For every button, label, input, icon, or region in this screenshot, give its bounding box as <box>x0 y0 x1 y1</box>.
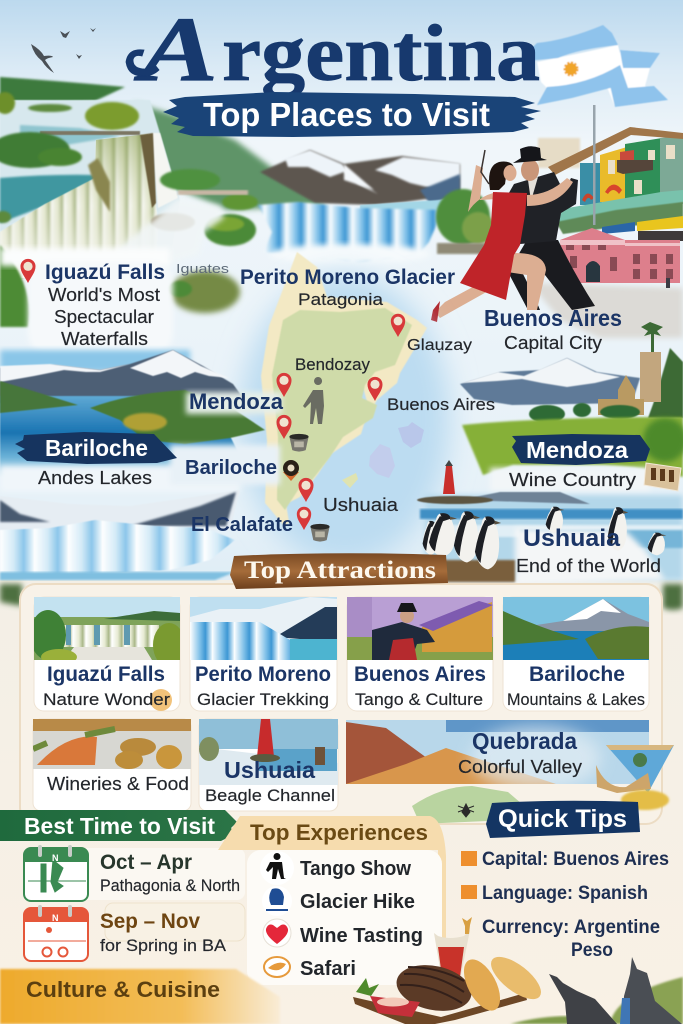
panel: quick tips: Currency: Argentine <box>482 917 660 938</box>
lighthouse <box>443 460 455 494</box>
illustration: tango dancers <box>431 146 595 322</box>
balcony <box>617 160 653 174</box>
bushes <box>0 92 258 327</box>
back fold <box>607 50 668 107</box>
subtitle banner <box>163 92 541 137</box>
map labels: Patagonia <box>298 290 384 309</box>
banner: Bariloche <box>15 432 177 464</box>
card: Iguazú Falls: Nature Wonder <box>43 690 170 709</box>
illustration: grass and bulls <box>510 957 683 1024</box>
map labels: Buenos Aires <box>484 305 622 331</box>
panel: quick tips: Language: Spanish <box>482 883 648 904</box>
forested shore <box>0 381 78 413</box>
teal wall <box>580 163 602 205</box>
icon: orange mail <box>461 885 477 899</box>
green heading <box>0 810 237 841</box>
panel: quick tips: Quick Tips <box>498 805 627 833</box>
text haze <box>515 528 665 586</box>
peninsula <box>90 390 265 444</box>
banner: Bariloche: Bariloche <box>45 435 148 461</box>
title: A <box>134 0 218 100</box>
card: Bariloche: Mountains & Lakes <box>507 690 645 709</box>
forest patches beside panel <box>0 584 683 610</box>
shore <box>425 560 515 582</box>
card: Bariloche <box>503 597 649 711</box>
card: Quebrada: Colorful Valley <box>458 757 582 777</box>
panel: best time to visit <box>0 810 245 961</box>
scene: Ushuaia coast <box>417 460 683 586</box>
card: Wineries & Food <box>33 719 191 811</box>
back leg <box>435 282 490 318</box>
panel: quick tips: Peso <box>571 940 613 961</box>
pink palace <box>560 228 680 283</box>
cream base <box>261 252 427 527</box>
church <box>598 375 644 415</box>
title: rgentina <box>222 10 540 98</box>
shop signs <box>637 216 683 231</box>
icon: heart <box>263 919 291 947</box>
card: Iguazú Falls: Iguazú Falls <box>47 663 165 686</box>
card: Ushuaia <box>199 719 338 811</box>
flowers <box>621 790 669 810</box>
scene: Bariloche lake <box>0 350 282 492</box>
rock strip <box>140 133 156 208</box>
back mountain slope <box>135 103 327 210</box>
label: Wine Country: Wine Country <box>509 470 636 490</box>
shoe <box>431 301 440 322</box>
upper river <box>0 100 180 260</box>
top band <box>517 25 618 62</box>
lake <box>360 199 455 217</box>
arches <box>605 184 622 194</box>
mountains <box>460 358 640 405</box>
green region <box>272 308 412 510</box>
scene: Buenos Aires buildings <box>530 105 683 338</box>
banner <box>486 801 640 838</box>
tree beside dancers <box>436 189 490 245</box>
label: Ushuaia: Ushuaia <box>523 525 621 552</box>
haze for text <box>28 262 173 354</box>
icon: red calendar: N <box>52 913 58 923</box>
icon: tango dancer <box>260 851 294 885</box>
front white <box>537 45 628 88</box>
panel: quick tips <box>461 801 669 961</box>
red dress <box>460 192 527 300</box>
card: Buenos Aires: Tango & Culture <box>355 690 483 709</box>
subtitle banner: Top Places to Visit <box>203 96 490 133</box>
teal pool <box>0 175 97 223</box>
card: Quebrada <box>346 720 649 790</box>
stick <box>481 150 489 184</box>
heading: Top Attractions: Top Attractions <box>244 557 436 584</box>
illustration: folded boat and sail <box>596 745 674 793</box>
birds <box>31 28 96 73</box>
hat <box>513 146 547 163</box>
lower bush <box>170 271 240 313</box>
woman second arm <box>527 178 573 206</box>
vineyard <box>462 417 683 477</box>
pin: Iguazú <box>20 259 36 283</box>
snow caps <box>285 150 460 194</box>
herbs <box>356 978 379 996</box>
panel: best time to visit: Best Time to Visit <box>24 813 215 839</box>
steak <box>392 959 476 1017</box>
haze behind Mendoza label <box>186 392 282 414</box>
bottom band <box>537 65 628 105</box>
wine picture <box>644 463 681 491</box>
bread <box>484 949 548 1007</box>
panel: quick tips: Capital: Buenos Aires <box>482 849 669 870</box>
woman hair <box>489 162 514 190</box>
man legs <box>508 240 595 310</box>
bull right <box>622 957 682 1024</box>
map labels: Perito Moreno Glacier <box>240 266 455 289</box>
white label haze <box>490 468 650 492</box>
man head <box>521 159 539 181</box>
blue harness <box>620 998 630 1024</box>
card: Perito Moreno: Glacier Trekking <box>197 690 329 709</box>
church tower <box>640 352 661 402</box>
white row panels <box>80 848 245 900</box>
panel: top experiences: Top Experiences <box>250 820 428 845</box>
pins and map markers <box>20 259 405 542</box>
label: Andes Lakes: Andes Lakes <box>38 468 152 488</box>
person icon <box>303 377 324 424</box>
map labels: Ushuaia <box>323 495 399 515</box>
mountains <box>260 150 460 205</box>
roof <box>548 127 683 175</box>
main waterfall <box>0 134 158 278</box>
scene: glacier front <box>0 490 240 580</box>
card: Bariloche: Bariloche <box>529 663 625 686</box>
map of Argentina <box>261 252 427 527</box>
banner: Mendoza: Mendoza <box>526 437 628 463</box>
second waterfall <box>152 133 178 208</box>
yellow wall <box>600 147 627 202</box>
panel: top experiences: Wine Tasting <box>300 925 423 947</box>
cream lower background <box>0 580 683 1024</box>
street <box>530 283 683 338</box>
cream building <box>538 138 580 168</box>
woman arm <box>468 165 497 212</box>
panel: best time to visit: Pathagonia & North <box>100 876 240 895</box>
foam <box>270 244 430 264</box>
map labels: Mendoza <box>189 389 284 414</box>
map labels <box>45 261 622 536</box>
card: Wineries & Food: Wineries & Food <box>47 774 189 794</box>
white list <box>247 850 442 985</box>
card: Perito Moreno: Perito Moreno <box>195 663 331 686</box>
map labels: Iguates <box>176 261 230 276</box>
island <box>417 496 493 504</box>
mountains <box>0 350 243 403</box>
label: End of the World: End of the World <box>516 556 661 576</box>
pedestrian <box>666 278 670 288</box>
panel: top experiences <box>218 816 446 985</box>
mist <box>98 198 224 266</box>
water bands <box>420 509 683 519</box>
title <box>126 0 540 100</box>
scene: Mendoza vineyard <box>460 322 683 492</box>
lamp post <box>593 105 596 225</box>
card: Buenos Aires: Buenos Aires <box>354 663 486 686</box>
dark pin <box>283 460 299 481</box>
rocks <box>151 213 195 231</box>
lake <box>0 396 240 478</box>
sun <box>565 63 577 75</box>
panel: top attractions <box>20 584 674 824</box>
illustration: green map patch <box>412 786 522 824</box>
right wall <box>660 136 683 204</box>
palm <box>641 322 663 352</box>
heading: Culture & Cuisine: Culture & Cuisine <box>26 977 220 1002</box>
banner: Mendoza <box>512 434 650 465</box>
front leg <box>507 253 546 310</box>
card: Quebrada: Quebrada <box>472 728 577 754</box>
map labels: Waterfalls <box>61 329 148 349</box>
icon: green calendar: N <box>52 853 58 863</box>
card: Buenos Aires <box>347 597 493 711</box>
card: Perito Moreno <box>190 597 337 711</box>
flag <box>517 25 668 107</box>
icon: glacier <box>262 886 292 916</box>
panel: top experiences: Tango Show <box>300 858 411 880</box>
icon: orange tag <box>461 851 477 866</box>
green wall <box>625 138 662 200</box>
forest band <box>0 77 125 103</box>
map labels: Capital City <box>504 333 602 353</box>
heading: Culture & Cuisine <box>0 969 280 1024</box>
panel: best time to visit: for Spring in BA <box>100 936 227 955</box>
green tint over falls <box>0 134 158 278</box>
orange sticker <box>150 689 172 711</box>
cypress <box>648 348 683 418</box>
panel: top experiences: Glacier Hike <box>300 891 415 913</box>
map ocean <box>240 275 450 565</box>
map labels: El Calafate <box>191 514 293 536</box>
map labels: Spectacular <box>54 307 154 327</box>
heading: Top Attractions <box>230 553 448 589</box>
bull left <box>549 974 617 1024</box>
card: Iguazú Falls <box>30 597 185 711</box>
icon: green calendar <box>24 845 88 901</box>
text: Sep – Nov: Sep – Nov <box>100 910 200 933</box>
map labels: World's Most <box>48 285 160 305</box>
mate cup <box>434 930 470 977</box>
icon: red calendar <box>24 905 88 961</box>
card: Ushuaia: Ushuaia <box>224 757 315 783</box>
windows <box>608 145 675 194</box>
scene: snowy Andes and glacier <box>258 150 494 264</box>
platform <box>40 131 140 135</box>
map labels: Iguazú Falls <box>45 261 165 284</box>
text: Oct – Apr: Oct – Apr <box>100 851 192 874</box>
map labels: Bariloche <box>185 457 277 479</box>
panel: top experiences: Safari <box>300 958 356 980</box>
icon: hand <box>462 917 472 934</box>
blue sky <box>0 350 190 372</box>
man torso and arm <box>502 172 578 245</box>
penguins <box>423 521 439 555</box>
red dish <box>370 996 420 1017</box>
green rail <box>556 190 683 225</box>
tan backing <box>218 816 446 946</box>
map labels: Glaụzay <box>407 337 472 354</box>
hedges <box>529 403 640 423</box>
board <box>353 993 527 1024</box>
icon: safari <box>264 957 290 977</box>
illustration: food board <box>353 930 548 1024</box>
scene: Iguazú Falls <box>0 77 327 354</box>
icon: spider <box>458 804 474 817</box>
snow-white band <box>0 466 240 492</box>
shirt <box>528 177 538 201</box>
snow <box>0 350 229 382</box>
map labels: Bendozay <box>295 355 370 374</box>
glacier wall <box>258 202 443 262</box>
woman face <box>504 165 516 181</box>
card: Ushuaia: Beagle Channel <box>205 786 335 805</box>
islands <box>398 422 424 448</box>
map labels: Buenos Aires <box>387 395 495 414</box>
arched door <box>586 261 600 282</box>
